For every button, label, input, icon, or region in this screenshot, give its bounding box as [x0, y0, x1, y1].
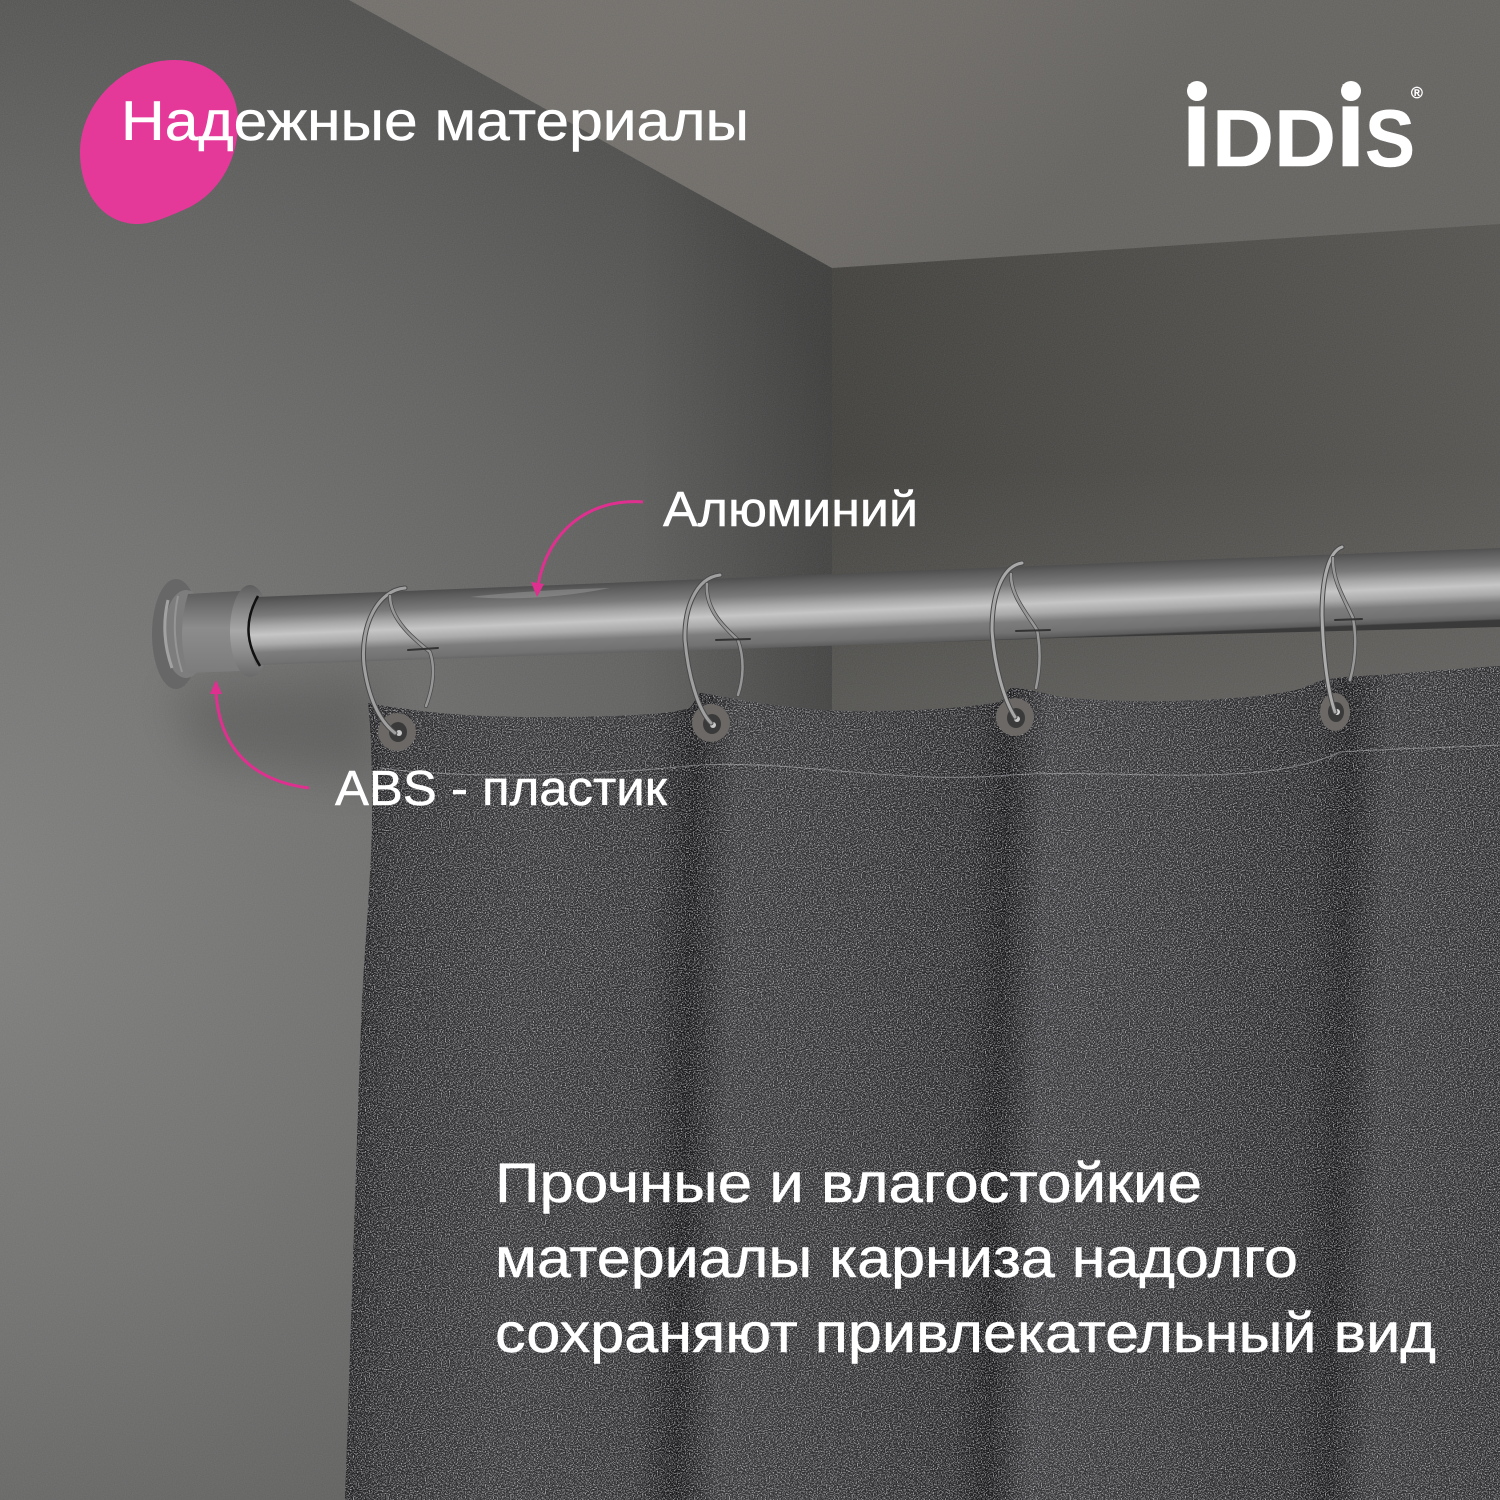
logo: iDDiS: ®: [1411, 85, 1423, 102]
logo: iDDiS: [1181, 65, 1423, 190]
logo: iDDiS: D: [1274, 94, 1336, 184]
hem stitch line: [380, 745, 1500, 777]
ring 2: [685, 575, 750, 742]
ring 3: [992, 563, 1050, 736]
curtain weave: [340, 660, 1500, 1500]
body text: сохраняют привлекательный вид: [495, 1301, 1436, 1364]
aluminium tube: [248, 548, 1500, 665]
panel: curtain rod: [152, 548, 1500, 689]
curtain cloth: [340, 660, 1500, 1500]
logo: iDDiS: D: [1212, 94, 1274, 184]
pink blob accent: [80, 60, 238, 224]
title: Надежные материалы: [121, 89, 749, 152]
body text: [495, 1151, 1436, 1364]
ring 4: [1320, 547, 1362, 731]
right wall: [832, 220, 1500, 1500]
wall flange: [152, 579, 208, 689]
mount shadow on the wall: [170, 680, 380, 780]
body text: материалы карниза надолго: [495, 1226, 1298, 1289]
body text: Прочные и влагостойкие: [495, 1151, 1202, 1214]
rings and grommets: [363, 547, 1362, 751]
logo: iDDiS: S: [1365, 94, 1415, 184]
left wall: [0, 0, 840, 1500]
arrow: aluminium callout: [531, 502, 643, 597]
logo: iDDiS: i: [1335, 65, 1366, 190]
panel: curtain: [340, 660, 1500, 1500]
mount body: [182, 591, 240, 673]
ceiling: [349, 0, 1500, 268]
mount collar: [230, 585, 270, 677]
label: aluminium: Алюминий: [663, 483, 918, 537]
black gasket: [248, 596, 260, 666]
arrow: ABS callout: [210, 680, 309, 788]
label: ABS plastic: ABS - пластик: [335, 762, 668, 816]
ring 1: [363, 588, 438, 751]
reflection on tube: [470, 588, 610, 598]
logo: iDDiS: i: [1181, 65, 1212, 190]
